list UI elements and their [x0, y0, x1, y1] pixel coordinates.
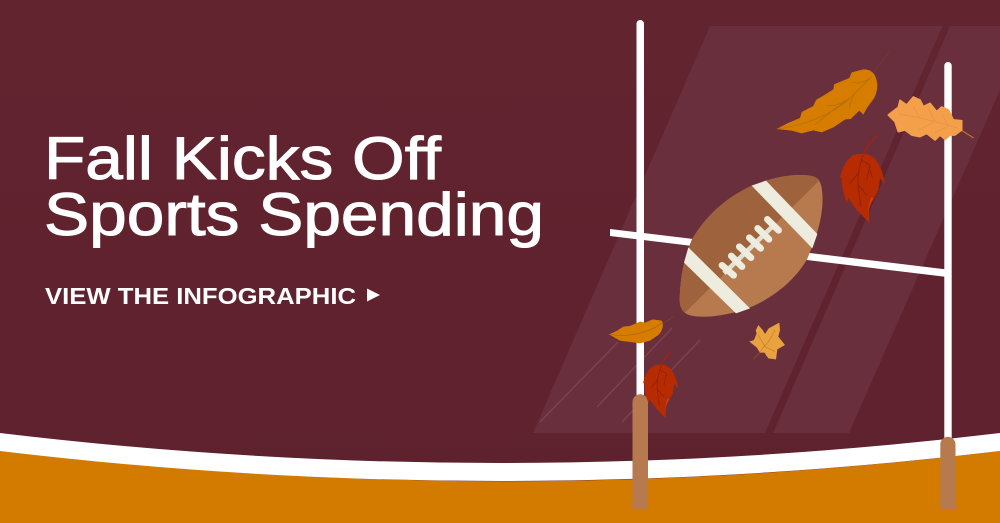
- goal post: left upright: [632, 20, 648, 509]
- leaf: red upper: [840, 136, 885, 223]
- motion streaks: [540, 328, 700, 422]
- leaf: red lower: [643, 351, 678, 418]
- ground: [0, 433, 1000, 523]
- goal post: crossbar: [610, 229, 947, 277]
- title: Fall Kicks Off: [44, 125, 441, 192]
- title: [44, 125, 544, 248]
- leaf: large orange: [777, 52, 889, 133]
- leaf: maple: [749, 323, 785, 359]
- football: [680, 175, 823, 317]
- icon: play arrow: [367, 288, 380, 302]
- call to action: VIEW THE INFOGRAPHIC: [45, 283, 356, 309]
- light panels behind goal: [533, 26, 1000, 433]
- title: Sports Spending: [44, 181, 544, 248]
- goal post: right upright: [940, 62, 956, 509]
- leaf: small orange: [609, 317, 673, 343]
- leaf: light orange oak: [888, 97, 974, 140]
